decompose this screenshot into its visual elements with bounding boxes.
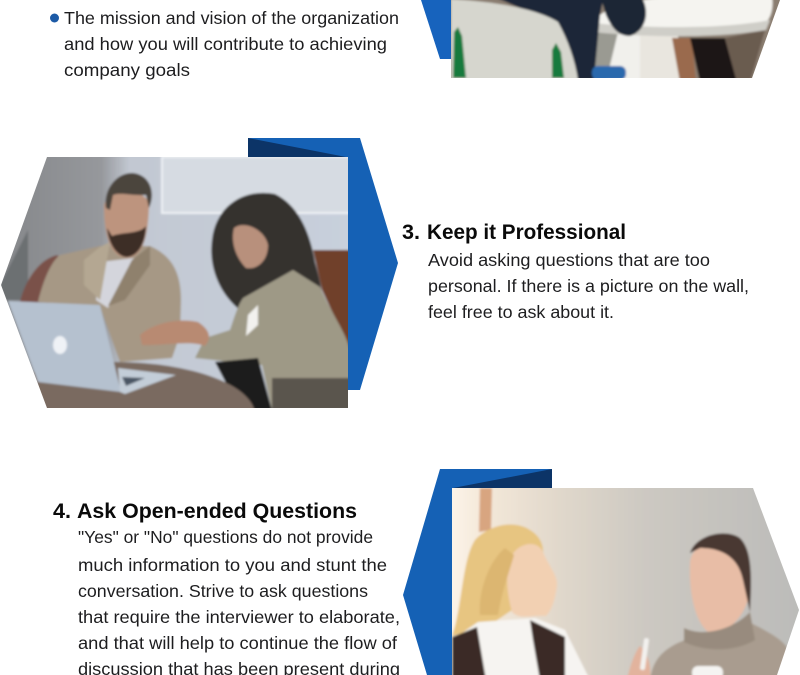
panel: photo 3 with blue hexagon [403,469,800,675]
photo: two people at a laptop [1,157,348,408]
photo: two women talking [445,485,800,675]
bullet text: The mission and vision of the organization [64,8,399,28]
heading: step 4: 4. [53,500,71,523]
heading: step 4: Ask Open-ended Questions [77,500,357,523]
top hexagon photo with blue backing [421,0,780,78]
heading: step 3: Keep it Professional [427,221,626,244]
table [34,360,256,408]
photo: chair and table [451,0,780,78]
text block: step 4 body: "Yes" or "No" questions do not provide [78,527,373,547]
panel: photo 2 with blue hexagon [1,138,398,408]
text block: step 3 body [428,250,749,322]
dark accent triangle [453,469,552,488]
man [38,246,181,362]
woman [211,193,322,310]
section 2 text: bullet item [50,8,399,80]
text block: step 3 body: personal. If there is a picture on the wall, [428,276,749,296]
text block: step 4 body: conversation. Strive to ask questions [78,581,368,601]
dark accent triangle [248,138,346,157]
bullet text: and how you will contribute to achieving [64,34,387,54]
text block: step 4 body: that require the interviewer to elaborate, [78,607,400,627]
laptop [8,301,121,392]
right woman [650,620,788,675]
blue hexagon backing [421,0,452,59]
heading: step 3: 3. [402,221,420,244]
text block: step 3 body: feel free to ask about it. [428,302,614,322]
text block: step 4 body: and that will help to continue the flow of [78,633,397,653]
bullet text [64,8,399,80]
hand [627,646,650,675]
icon: bullet [50,14,59,22]
blue hexagon backing [248,138,398,390]
bullet text: company goals [64,60,190,80]
blue hexagon backing [403,469,552,675]
text block: step 4 body [78,527,400,675]
text block: step 4 body: much information to you and stunt the [78,555,387,575]
text block: step 3 body: Avoid asking questions that are too [428,250,710,270]
left woman [452,525,543,636]
